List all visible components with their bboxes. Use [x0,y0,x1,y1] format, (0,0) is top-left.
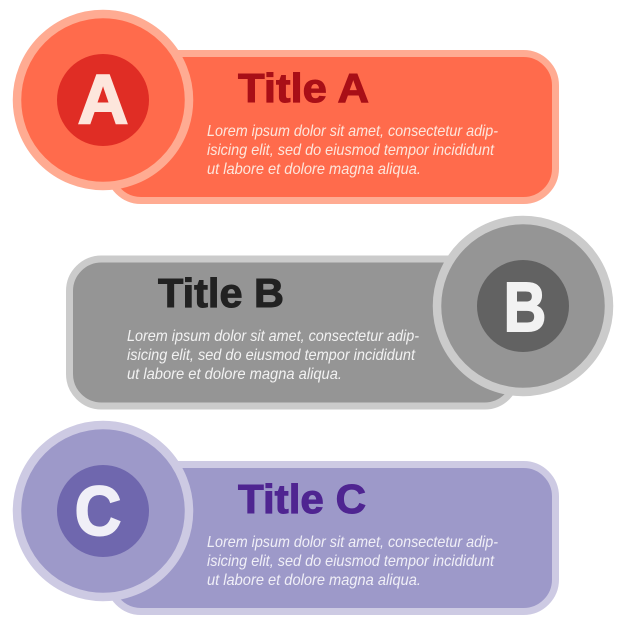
panel: Title C [109,464,556,612]
text block: panel B body: ut labore et dolore magna aliqua. [127,366,342,383]
text block: panel C body: isicing elit, sed do eiusmod tempor incididunt [207,553,495,570]
icon: badge B [437,220,609,392]
text block: panel A body [207,123,498,178]
text block: panel A body: isicing elit, sed do eiusmod tempor incididunt [207,142,495,159]
text block: panel A body: Lorem ipsum dolor sit amet, consectetur adip- [207,123,498,140]
icon: badge C [17,425,189,597]
heading: Title A: Title A [238,65,369,111]
text block: panel C body: ut labore et dolore magna aliqua. [207,572,421,589]
heading: Title B: Title B [158,270,284,316]
icon: badge A: A [78,60,128,138]
icon: badge A [17,14,189,186]
text block: panel B body: Lorem ipsum dolor sit amet, consectetur adip- [127,328,419,345]
text block: panel B body: isicing elit, sed do eiusmod tempor incididunt [127,347,416,364]
text block: panel A body: ut labore et dolore magna aliqua. [207,161,421,178]
panel: Title A [109,54,556,200]
icon: badge C: C [75,473,121,551]
heading: Title C: Title C [238,476,366,522]
text block: panel C body [207,534,498,589]
text block: panel B body [127,328,419,383]
text block: panel C body: Lorem ipsum dolor sit amet, consectetur adip- [207,534,498,551]
icon: badge B: B [504,267,546,346]
panel: Title B [70,259,516,406]
